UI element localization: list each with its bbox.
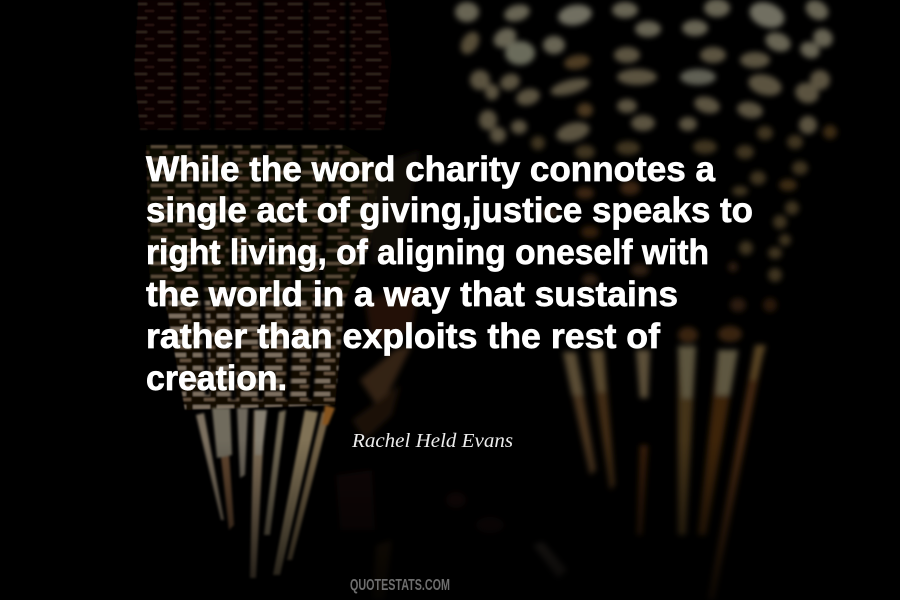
quote text: rather than exploits the rest of — [146, 316, 660, 356]
background: faint lower marks — [446, 492, 567, 578]
background: right lamp fringe spikes — [563, 298, 777, 600]
author signature: Rachel Held Evans — [351, 430, 513, 452]
background: lower fade — [150, 440, 850, 600]
quote text: creation. — [146, 358, 287, 398]
quote text: single act of giving,justice speaks to — [146, 190, 753, 230]
background: left lamp fringe spikes — [196, 405, 335, 578]
background: right lit lamp blobs — [455, 0, 837, 286]
watermark: QUOTESTATS.COM — [350, 577, 450, 594]
quote text — [146, 149, 753, 398]
background: left woven lamp — [0, 0, 450, 410]
quote text: the world in a way that sustains — [146, 274, 678, 314]
background: centre wood shapes — [336, 150, 420, 600]
quote text: While the word charity connotes a — [146, 149, 715, 189]
quote text: right living, of aligning oneself with — [146, 232, 709, 272]
